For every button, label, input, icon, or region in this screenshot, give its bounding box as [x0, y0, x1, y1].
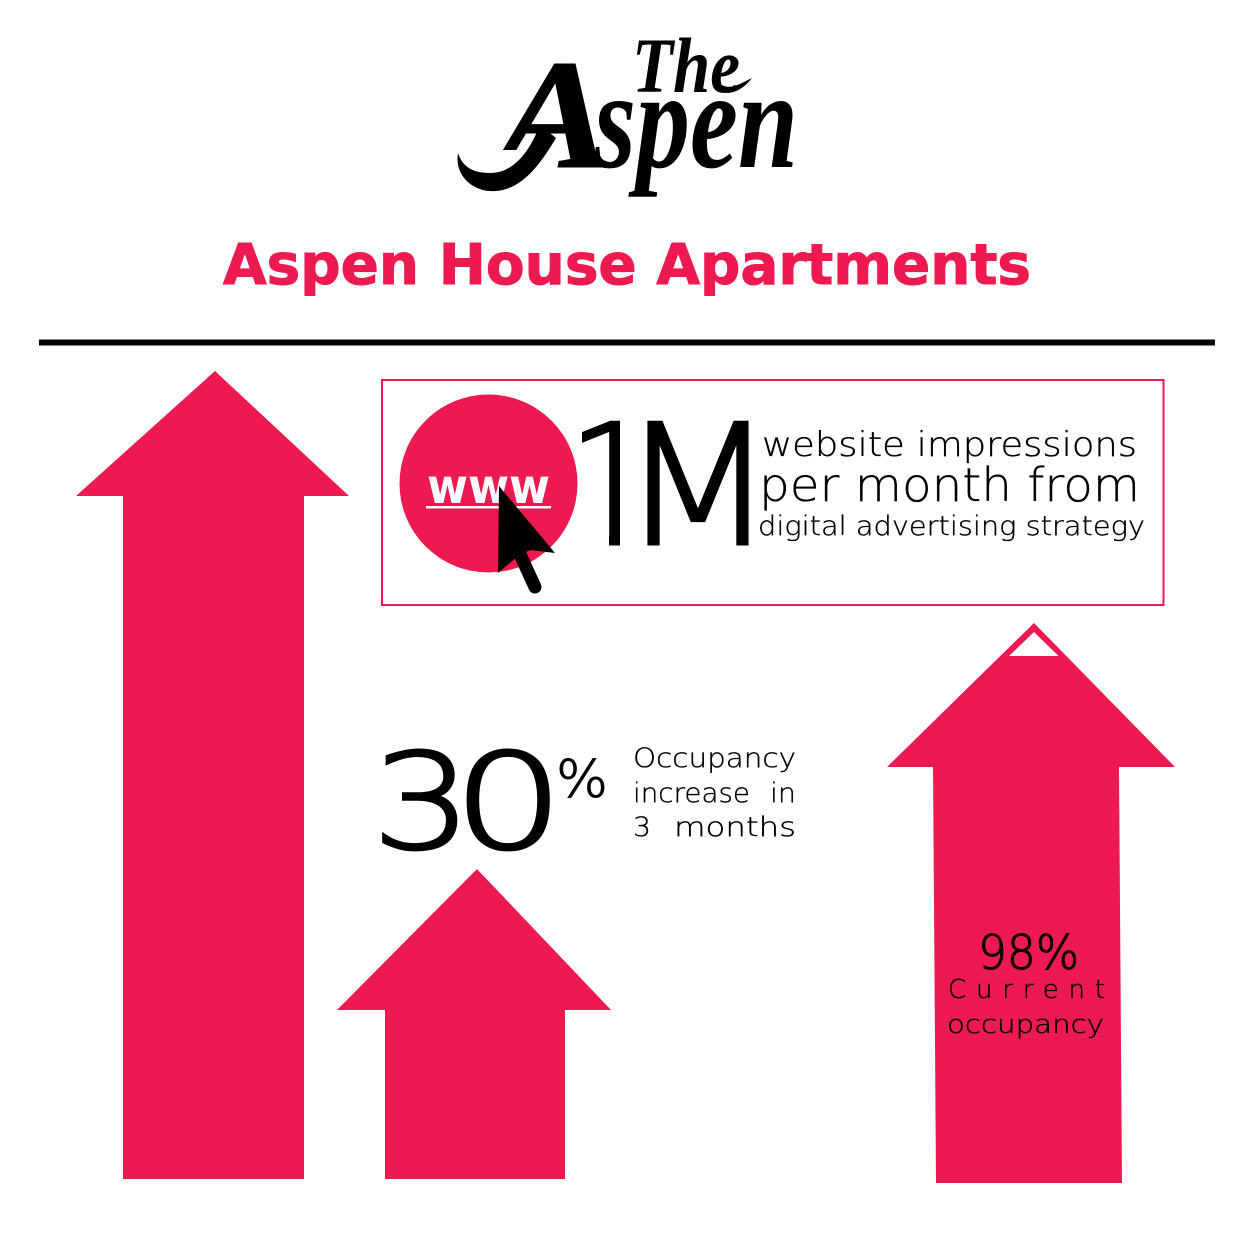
- stat: 30%: %: [556, 750, 608, 810]
- text: digital advertising strategy: digital advertising strategy: [758, 511, 1145, 542]
- text: per month from: per month from: [759, 458, 1140, 512]
- icon: www circle with cursor: www: [427, 459, 550, 515]
- arrow: short middle: [337, 869, 611, 1179]
- text: occupancy increase: [633, 743, 796, 843]
- logo: The Aspen: The: [632, 22, 740, 109]
- stat: 30%: 3: [372, 726, 472, 880]
- text: occupancy increase: 3: [633, 812, 651, 843]
- stat: 1M: M: [620, 390, 776, 584]
- logo: The Aspen: [458, 38, 793, 197]
- text: current occupancy: occupancy: [947, 1010, 1104, 1040]
- logo: The Aspen: A: [487, 28, 613, 201]
- text: occupancy increase: months: [674, 812, 796, 843]
- stat: 30%: 0: [453, 726, 564, 880]
- arrow: right: [887, 623, 1175, 1183]
- arrow: tall left: [76, 371, 349, 1179]
- text: occupancy increase: increase: [633, 778, 750, 809]
- stat: 1M: [582, 420, 749, 546]
- stat: 98%: 98%: [978, 926, 1079, 981]
- text: occupancy increase: Occupancy: [633, 743, 796, 774]
- text: current occupancy: Current: [948, 975, 1105, 1005]
- text: website impressions: website impressions: [762, 425, 1137, 465]
- stat: 1M: 1: [559, 390, 665, 584]
- text: occupancy increase: in: [770, 778, 796, 809]
- text: current occupancy: [947, 975, 1105, 1040]
- icon: www circle with cursor: [400, 394, 578, 587]
- panel: website impressions: [382, 380, 1164, 605]
- logo: The Aspen: spen: [593, 43, 798, 198]
- title: Aspen House Apartments: [223, 233, 1031, 298]
- stat: 30%: [372, 726, 608, 880]
